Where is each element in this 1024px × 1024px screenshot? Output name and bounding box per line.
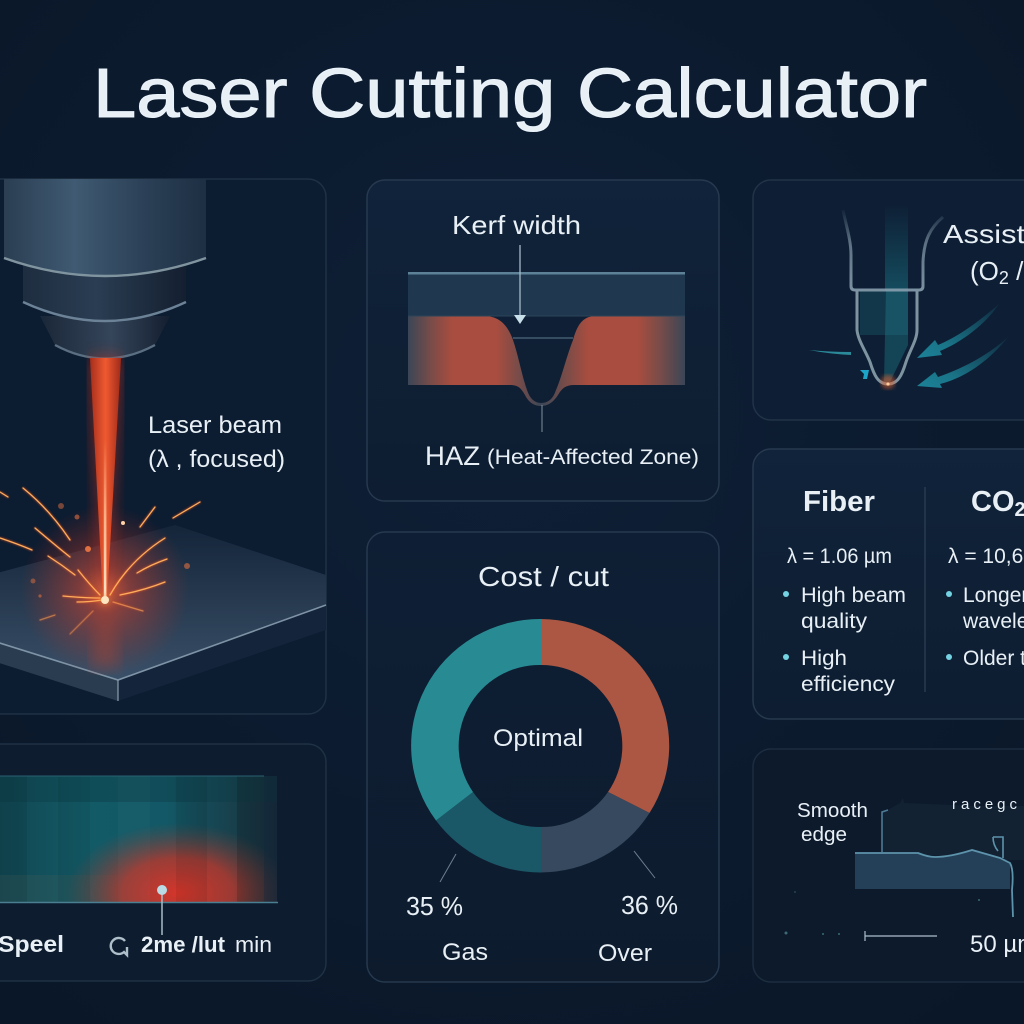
panel: kerf width <box>367 180 719 501</box>
donut chart: Optimal <box>493 725 583 752</box>
kerf label: Kerf width <box>452 210 581 240</box>
column: fiber: efficiency <box>801 673 896 696</box>
haz label: (Heat-Affected Zone) <box>487 446 699 469</box>
speed value: min <box>235 932 272 957</box>
label: assist gas: (O <box>970 256 999 286</box>
arrows: assist gas flow <box>809 304 1008 388</box>
label: assist gas: 2 <box>999 268 1009 288</box>
column: fiber: High beam <box>801 584 906 607</box>
laser nozzle <box>4 179 206 358</box>
column: fiber <box>783 486 906 696</box>
label: laser beam: (λ , focused) <box>148 446 285 473</box>
column: fiber: High <box>801 647 847 670</box>
panel: cost per cut <box>367 532 719 982</box>
scale bar <box>865 931 1024 958</box>
label: gas share <box>406 854 488 966</box>
kerf cross-section <box>408 272 685 406</box>
panel: fiber vs CO2 <box>753 449 1024 719</box>
laser beam glow and sparks <box>0 358 200 675</box>
metal plate <box>0 525 326 701</box>
speckles <box>784 891 980 935</box>
icon: timer <box>111 938 127 955</box>
donut chart <box>411 619 669 873</box>
title: Laser Cutting Calculator <box>93 54 927 132</box>
gas nozzle <box>843 205 943 389</box>
label: over share: Over <box>598 940 652 967</box>
label: laser beam: Laser beam <box>148 412 282 439</box>
label: gas share: Gas <box>442 939 488 966</box>
label: smooth edge: Smooth <box>797 800 868 822</box>
label: gas share: 35 % <box>406 891 463 921</box>
label: smooth edge <box>797 800 868 846</box>
edge cross-section <box>855 798 1024 917</box>
marker <box>157 885 167 935</box>
speed value: 2me /lut <box>141 932 226 957</box>
haz label <box>425 441 699 471</box>
column: fiber: quality <box>801 610 868 633</box>
panel: edge quality <box>753 749 1024 982</box>
label: over share: 36 % <box>621 890 678 920</box>
label: roughness text: racegc <box>952 796 1021 813</box>
label: smooth edge: edge <box>801 824 847 846</box>
label: assist gas: Assist <box>943 219 1024 249</box>
arrow: kerf pointer <box>514 245 526 324</box>
column: CO2 <box>946 486 1024 670</box>
heatmap chart <box>0 776 290 963</box>
column: fiber: λ = 1.06 µm <box>787 545 892 568</box>
heading: cost / cut: Cost / cut <box>478 561 609 592</box>
haz pointer <box>541 405 543 432</box>
label: laser beam <box>148 412 285 473</box>
haz label: HAZ <box>425 441 480 471</box>
label: over share <box>598 851 678 967</box>
panel: assist gas <box>753 180 1024 420</box>
column: CO2: CO <box>971 486 1014 518</box>
panel: laser beam on plate <box>0 179 326 714</box>
column: fiber: Fiber <box>803 486 875 518</box>
label: assist gas <box>943 219 1024 288</box>
panel: speed heatmap <box>0 744 326 981</box>
speed value <box>141 932 272 957</box>
